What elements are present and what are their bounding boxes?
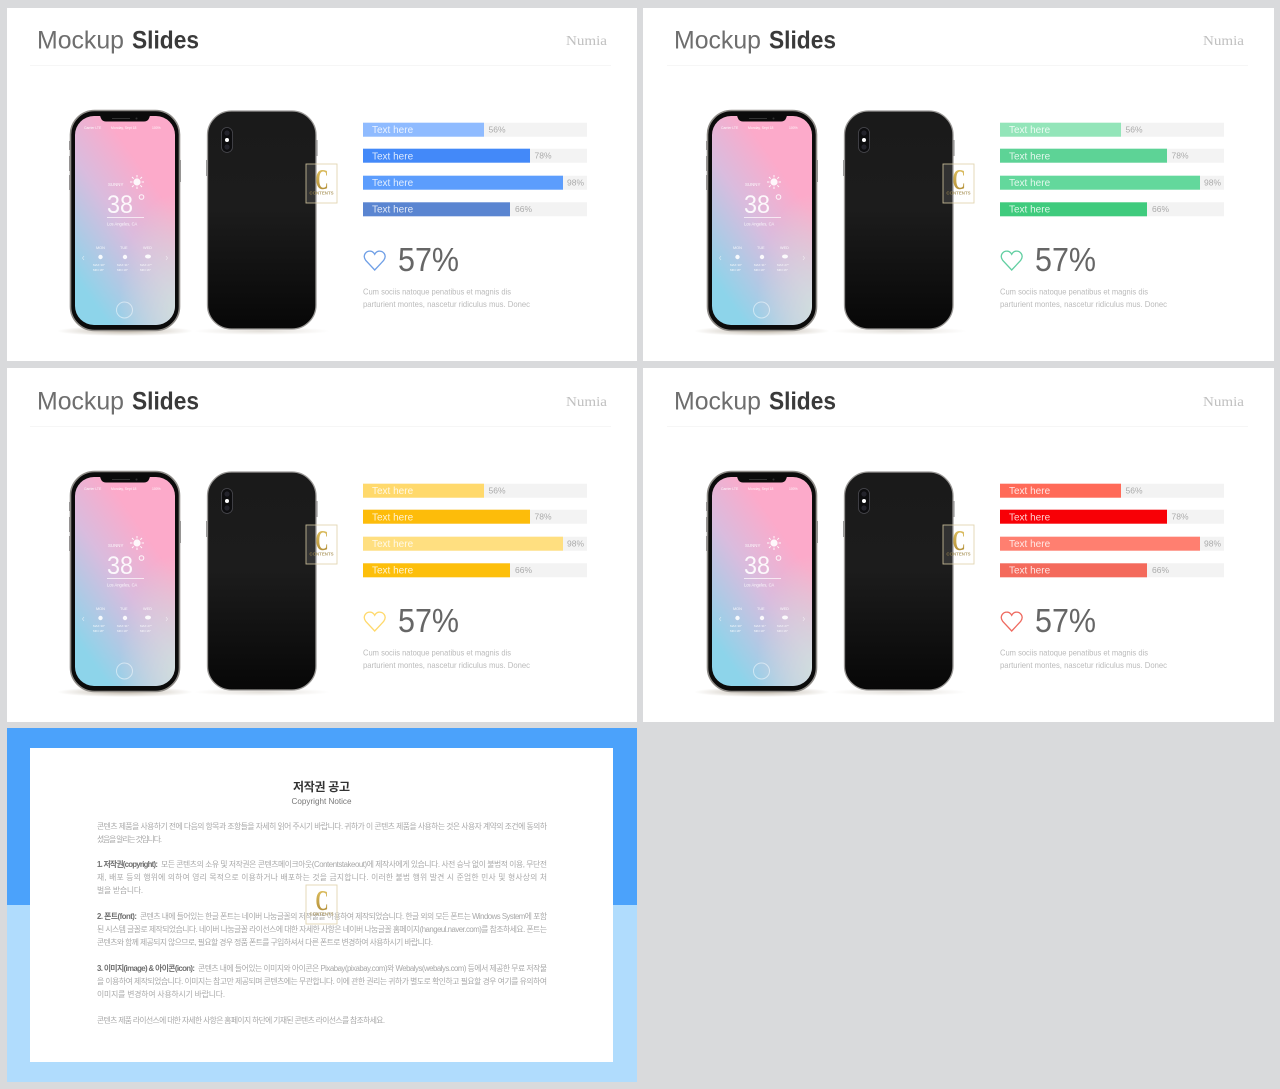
phone front with weather screen: MIN 18°	[730, 629, 742, 633]
bar chart: Text here	[1009, 512, 1051, 524]
phone front with weather screen: Los Angeles, CA	[107, 582, 138, 588]
section 2: font: 된 시스템 글꼴로 제작되었습니다. 네이버 나눔글꼴 라이선스에 대한 자세한 사항은 네이버 나눔글꼴 홈페이지(hangeul.naver.com)를 참조하세요. 폰트는	[97, 924, 547, 934]
description	[363, 286, 531, 309]
notice subtitle: Copyright Notice	[292, 796, 352, 806]
phone front with weather screen: MON	[96, 607, 105, 611]
watermark: C	[316, 164, 328, 196]
slide panel: copyright notice	[7, 728, 637, 1082]
description: parturient montes, nascetur ridiculus mus. Donec	[363, 299, 531, 309]
statistic: 57%	[398, 602, 459, 639]
phone front with weather screen: MAX 30°	[730, 263, 743, 267]
brand name: Numia	[1203, 34, 1245, 49]
section 2: font	[97, 911, 547, 947]
bar chart: Text here	[372, 566, 414, 576]
phone front with weather screen: MAX 27°	[777, 624, 790, 628]
slide title: Slides	[132, 388, 199, 416]
bar chart: 78%	[1172, 150, 1189, 160]
phone front with weather screen: MIN 19°	[754, 268, 766, 272]
phone front with weather screen: Monday, Sept 18	[748, 487, 773, 491]
slide title	[37, 26, 199, 54]
icon: heart	[1001, 612, 1022, 631]
phone back	[194, 111, 330, 335]
bar chart: 56%	[488, 124, 506, 134]
statistic: 57%	[1035, 241, 1096, 278]
section 2: font: 콘텐츠 내에 들어있는 한글 폰트는 네이버 나눔글꼴의 저작물을 이용하여 제작되었습니다. 한글 외의 모든 폰트는 Windows System에 포함	[140, 911, 547, 921]
section 1: copyright	[97, 859, 547, 895]
phone front with weather screen: 100%	[152, 487, 161, 491]
phone front with weather screen	[694, 472, 830, 697]
description: parturient montes, nascetur ridiculus mus. Donec	[1000, 299, 1168, 309]
watermark: C	[952, 164, 966, 196]
bar chart: 56%	[1126, 124, 1143, 134]
phone front with weather screen: MIN 18°	[93, 629, 105, 633]
phone front with weather screen: MIN 19°	[117, 268, 129, 272]
bar chart: Text here	[372, 125, 414, 136]
phone front with weather screen: MON	[733, 246, 742, 250]
phone front with weather screen: MIN 16°	[777, 268, 789, 272]
watermark: CONTENTS	[309, 190, 334, 196]
phone back	[831, 111, 967, 335]
bar chart: Text here	[372, 512, 414, 524]
phone front with weather screen: Carrier LTE	[721, 126, 739, 130]
section 3: image and icon: 을 이용하여 제작되었습니다. 이미지는 참고만 제공되며 콘텐츠에는 무관합니다. 이에 관한 권리는 귀하가 별도로 확인하고 필요할 경우 여기를 유의하여	[97, 976, 547, 986]
section 3: image and icon: 콘텐츠 내에 들어있는 이미지와 아이콘은 Pixabay(pixabay.com)와 Webalys(webalys.com) 등에서 제공한 무료 저작물	[198, 963, 547, 973]
phone front with weather screen: 38	[107, 191, 133, 219]
section 1: copyright: 벌을 받습니다.	[97, 885, 143, 895]
bar chart: 56%	[1126, 486, 1143, 496]
bar chart	[1000, 123, 1224, 216]
section 3: image and icon: 이미지를 변경하여 사용하시기 바랍니다.	[97, 989, 225, 999]
bar chart: 66%	[515, 204, 532, 214]
phone front with weather screen: SUNNY	[108, 543, 123, 548]
phone front with weather screen: MIN 16°	[140, 268, 152, 272]
slide title: Slides	[769, 26, 836, 54]
statistic: 57%	[1035, 602, 1096, 639]
section 1: copyright: 모든 콘텐츠의 소유 및 저작권은 콘텐츠메이크아웃(Contentstakeout)에 제작사에게 있습니다. 사전 승낙 없이 불법적 이용, 무단전	[161, 859, 547, 869]
phone front with weather screen: Monday, Sept 18	[111, 126, 136, 130]
phone front with weather screen: Los Angeles, CA	[107, 222, 138, 226]
description	[1000, 286, 1168, 309]
bar chart: 78%	[534, 150, 552, 160]
phone back	[831, 472, 967, 696]
brand name: Numia	[1203, 395, 1245, 410]
phone front with weather screen: 100%	[789, 487, 798, 491]
phone front with weather screen: MAX 27°	[140, 624, 153, 628]
phone front with weather screen: MAX 30°	[93, 624, 106, 628]
phone front with weather screen: Carrier LTE	[84, 487, 102, 491]
watermark	[306, 164, 337, 203]
slide title	[37, 388, 199, 416]
bar chart: Text here	[372, 204, 414, 216]
bar chart	[363, 484, 587, 577]
phone front with weather screen: Monday, Sept 18	[111, 487, 136, 491]
bar chart: Text here	[1009, 125, 1051, 136]
icon: heart	[1001, 251, 1022, 270]
bar chart	[1000, 484, 1224, 577]
phone front with weather screen: MAX 31°	[754, 263, 767, 267]
bar chart: Text here	[1009, 204, 1051, 216]
watermark	[943, 164, 974, 203]
slide title: Mockup	[674, 388, 761, 416]
phone front with weather screen	[694, 110, 830, 336]
bar chart: Text here	[372, 178, 414, 189]
description	[363, 648, 531, 670]
notice intro: 셨음을 알리는 것입니다.	[97, 834, 162, 844]
slide title: Mockup	[37, 388, 124, 416]
description: Cum sociis natoque penatibus et magnis dis	[1000, 648, 1148, 658]
section 3: image and icon	[97, 963, 547, 999]
bar chart: 98%	[567, 178, 584, 188]
bar chart: Text here	[1009, 486, 1051, 497]
phone front with weather screen: TUE	[120, 246, 128, 250]
watermark: C	[316, 885, 328, 917]
section 2: font: 2. 폰트(font):	[97, 912, 137, 921]
phone front with weather screen: SUNNY	[108, 182, 123, 187]
watermark: CONTENTS	[946, 190, 971, 196]
bar chart: 98%	[1204, 538, 1221, 548]
phone front with weather screen: SUNNY	[745, 182, 760, 187]
bar chart: Text here	[1009, 566, 1051, 576]
phone front with weather screen: WED	[780, 246, 789, 250]
phone front with weather screen: TUE	[757, 246, 765, 250]
phone front with weather screen: MAX 27°	[140, 263, 153, 267]
phone front with weather screen: 38	[744, 552, 770, 580]
slide title: Slides	[132, 26, 199, 54]
slide title: Mockup	[674, 26, 761, 54]
phone front with weather screen: MON	[96, 246, 105, 250]
phone front with weather screen: MIN 18°	[93, 268, 105, 272]
bar chart: 66%	[1152, 204, 1169, 214]
bar chart: 66%	[1152, 565, 1169, 575]
bar chart: 78%	[1172, 512, 1189, 522]
description: parturient montes, nascetur ridiculus mus. Donec	[363, 660, 531, 670]
bar chart: Text here	[372, 152, 414, 162]
watermark	[306, 525, 337, 564]
phone front with weather screen: TUE	[120, 607, 128, 611]
slide title	[674, 26, 836, 54]
phone front with weather screen: MIN 19°	[754, 629, 766, 633]
description	[1000, 648, 1168, 670]
phone front with weather screen: Carrier LTE	[721, 487, 739, 491]
slide title: Slides	[769, 388, 836, 416]
phone front with weather screen: MAX 31°	[117, 624, 130, 628]
phone front with weather screen: MAX 27°	[777, 263, 790, 267]
phone front with weather screen: 100%	[152, 126, 161, 130]
watermark: C	[316, 525, 328, 557]
section 2: font: 콘텐츠와 함께 제공되지 않으므로, 필요할 경우 정품 폰트를 구입하셔서 다른 폰트로 변경하여 사용하시기 바랍니다.	[97, 937, 433, 947]
bar chart: 56%	[488, 486, 506, 496]
phone front with weather screen: SUNNY	[745, 543, 760, 548]
bar chart	[363, 123, 587, 216]
icon: heart	[364, 251, 385, 270]
phone front with weather screen	[57, 472, 193, 697]
slide panel: blue	[7, 8, 637, 361]
brand name: Numia	[566, 34, 608, 49]
slide title: Mockup	[37, 26, 124, 54]
bar chart: Text here	[372, 539, 414, 550]
notice intro: 콘텐츠 제품을 사용하기 전에 다음의 항목과 조항들을 자세히 읽어 주시기 바랍니다. 귀하가 이 콘텐츠 제품을 사용하는 것은 사용자 계약의 조건에 동의하	[97, 821, 547, 831]
watermark: CONTENTS	[309, 912, 334, 916]
watermark: CONTENTS	[946, 552, 971, 556]
description: parturient montes, nascetur ridiculus mus. Donec	[1000, 660, 1168, 670]
bar chart: Text here	[372, 486, 414, 497]
phone front with weather screen: Los Angeles, CA	[744, 222, 775, 226]
license note: 콘텐츠 제품 라이선스에 대한 자세한 사항은 홈페이지 하단에 기재된 콘텐츠 라이선스를 참조하세요.	[97, 1015, 385, 1025]
phone back	[194, 472, 330, 696]
phone front with weather screen: 38	[744, 191, 770, 219]
section 1: copyright: 1. 저작권(copyright):	[97, 859, 158, 869]
phone front with weather screen: WED	[143, 607, 152, 611]
slide panel: red	[643, 368, 1274, 722]
bar chart: Text here	[1009, 178, 1051, 189]
brand name: Numia	[566, 395, 608, 410]
bar chart: 98%	[1204, 178, 1221, 188]
phone front with weather screen: MIN 18°	[730, 268, 742, 272]
watermark	[943, 525, 974, 564]
bar chart: Text here	[1009, 152, 1051, 162]
description: Cum sociis natoque penatibus et magnis dis	[363, 648, 511, 658]
phone front with weather screen: MAX 31°	[117, 263, 130, 267]
phone front with weather screen: MIN 16°	[777, 629, 789, 633]
watermark: CONTENTS	[309, 552, 334, 556]
phone front with weather screen: Monday, Sept 18	[748, 126, 773, 130]
phone front with weather screen: 38	[107, 552, 133, 580]
notice intro	[97, 821, 547, 844]
section 1: copyright: 재, 배포 등의 행위에 의하여 영리 목적으로 이용하거나 배포하는 것을 금지합니다. 이러한 불법 행위 발견 시 준엄한 민사 및 형사상의 처	[97, 872, 547, 882]
phone front with weather screen: Los Angeles, CA	[744, 582, 775, 588]
phone front with weather screen: WED	[780, 607, 789, 611]
phone front with weather screen: MAX 31°	[754, 624, 767, 628]
bar chart: 78%	[534, 512, 552, 522]
bar chart: Text here	[1009, 539, 1051, 550]
bar chart: 98%	[567, 538, 584, 548]
phone front with weather screen: MIN 19°	[117, 629, 129, 633]
phone front with weather screen: Carrier LTE	[84, 126, 102, 130]
description: Cum sociis natoque penatibus et magnis dis	[363, 286, 511, 296]
phone front with weather screen: 100%	[789, 126, 798, 130]
phone front with weather screen: MON	[733, 607, 742, 611]
slide panel: yellow	[7, 368, 637, 722]
watermark	[306, 885, 337, 924]
phone front with weather screen: MIN 16°	[140, 629, 152, 633]
icon: heart	[364, 612, 385, 631]
description: Cum sociis natoque penatibus et magnis dis	[1000, 286, 1148, 296]
phone front with weather screen: MAX 30°	[93, 263, 106, 267]
statistic: 57%	[398, 241, 459, 278]
watermark: C	[952, 525, 966, 557]
phone front with weather screen: WED	[143, 246, 152, 250]
phone front with weather screen	[57, 110, 193, 336]
bar chart: 66%	[515, 565, 532, 575]
phone front with weather screen: MAX 30°	[730, 624, 743, 628]
slide title	[674, 388, 836, 416]
notice title: 저작권 공고	[293, 779, 350, 794]
phone front with weather screen: TUE	[757, 607, 765, 611]
section 3: image and icon: 3. 이미지(image) & 아이콘(icon):	[97, 963, 195, 973]
slide panel: green	[643, 8, 1274, 361]
